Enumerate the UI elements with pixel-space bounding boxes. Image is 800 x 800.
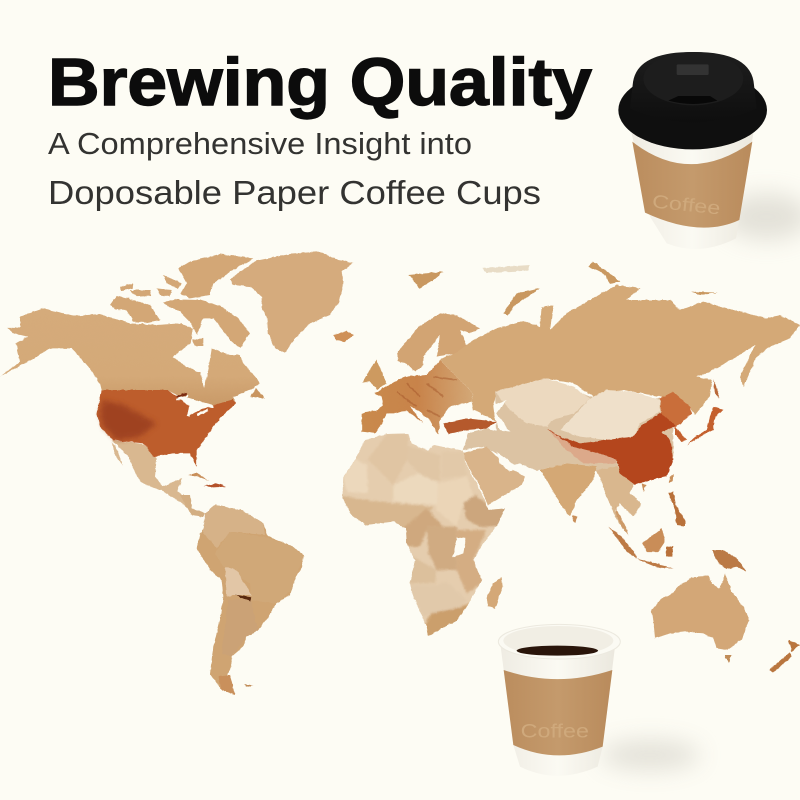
china xyxy=(547,407,692,485)
asian islands xyxy=(573,474,673,523)
egypt xyxy=(464,460,465,461)
sulawesi xyxy=(666,546,673,557)
northern south america xyxy=(203,505,265,548)
arctic russian islands xyxy=(408,262,718,315)
cup shadow xyxy=(600,740,700,770)
europe xyxy=(362,360,473,435)
angola xyxy=(410,555,437,583)
korea xyxy=(675,427,687,442)
africa base xyxy=(342,434,505,636)
mexico xyxy=(112,440,204,517)
cup body xyxy=(501,647,615,776)
greenland xyxy=(230,252,353,353)
european mountains xyxy=(397,377,457,417)
tibet plateau xyxy=(548,430,617,463)
central west africa xyxy=(403,508,443,547)
lid logo xyxy=(677,64,709,75)
kraft sleeve xyxy=(504,670,612,755)
sleeve coffee text: Coffee xyxy=(651,190,721,218)
paraguay dark stripe xyxy=(235,595,252,601)
cup rim xyxy=(498,624,620,659)
lid dome xyxy=(630,52,757,122)
newfoundland xyxy=(250,388,265,398)
manchuria xyxy=(660,392,692,427)
world map xyxy=(0,252,800,695)
southeast asia xyxy=(597,467,642,528)
united states xyxy=(97,390,236,467)
sumatra xyxy=(608,527,637,558)
africa country shading xyxy=(337,433,510,640)
western us dark area xyxy=(100,400,157,440)
sakhalin xyxy=(713,380,719,398)
sudan xyxy=(438,478,472,523)
malay peninsula xyxy=(615,507,628,535)
eurasia xyxy=(362,262,800,528)
cup inside xyxy=(503,626,613,655)
lake victoria xyxy=(453,537,466,557)
congo xyxy=(427,527,457,570)
turkey xyxy=(443,418,497,434)
cup shadow xyxy=(723,193,800,240)
coffee surface xyxy=(517,646,598,656)
cup with coffee xyxy=(498,624,700,776)
canada and alaska xyxy=(0,308,260,405)
iran and middle east xyxy=(463,423,567,471)
arctic islands xyxy=(110,254,253,348)
madagascar xyxy=(487,577,503,608)
arabia xyxy=(462,447,525,505)
mauritania and mali xyxy=(343,458,368,493)
uk xyxy=(362,360,387,390)
india xyxy=(540,463,597,517)
subtitle line 1: A Comprehensive Insight into xyxy=(48,126,472,161)
kraft sleeve xyxy=(632,142,752,228)
north america and greenland xyxy=(0,252,354,517)
franz josef land xyxy=(482,265,530,273)
libya xyxy=(408,448,439,479)
new zealand xyxy=(769,640,800,673)
australia xyxy=(652,573,749,650)
south america outline xyxy=(197,505,304,695)
sleeve coffee text: Coffee xyxy=(521,722,589,743)
java xyxy=(635,558,673,569)
southern africa xyxy=(410,586,418,606)
west africa xyxy=(337,495,433,530)
central america xyxy=(180,495,205,517)
great lakes xyxy=(177,396,213,417)
caspian sea xyxy=(493,400,510,432)
southeast asia islands and oceania xyxy=(608,492,800,673)
cup body xyxy=(632,133,753,249)
algeria xyxy=(369,434,408,484)
iceland xyxy=(333,332,354,342)
south africa xyxy=(424,601,470,636)
tasmania xyxy=(724,655,732,663)
falklands xyxy=(244,684,253,687)
japan xyxy=(687,407,723,445)
africa and south america xyxy=(180,427,510,695)
argentina xyxy=(222,598,258,657)
patagonia tip xyxy=(218,675,235,695)
niger and chad xyxy=(393,473,438,505)
subtitle line 2: Doposable Paper Coffee Cups xyxy=(48,174,541,211)
central asia xyxy=(495,378,590,427)
asia base land xyxy=(495,378,690,485)
new guinea xyxy=(712,550,747,572)
russia xyxy=(440,285,800,422)
brazil xyxy=(215,532,303,603)
title: Brewing Quality xyxy=(48,45,592,120)
ethiopia xyxy=(463,495,510,527)
borneo xyxy=(642,528,665,552)
scandinavia xyxy=(397,313,480,372)
philippines xyxy=(668,492,685,526)
lid rim xyxy=(618,71,767,149)
cup with black lid xyxy=(618,52,800,249)
lid sip opening xyxy=(668,96,717,104)
africa xyxy=(342,434,505,636)
caribbean islands xyxy=(188,473,209,481)
east africa xyxy=(457,530,487,593)
persian gulf xyxy=(497,452,517,472)
lid top xyxy=(643,52,743,105)
bolivia xyxy=(225,567,252,597)
mongolia and north china xyxy=(560,390,660,440)
